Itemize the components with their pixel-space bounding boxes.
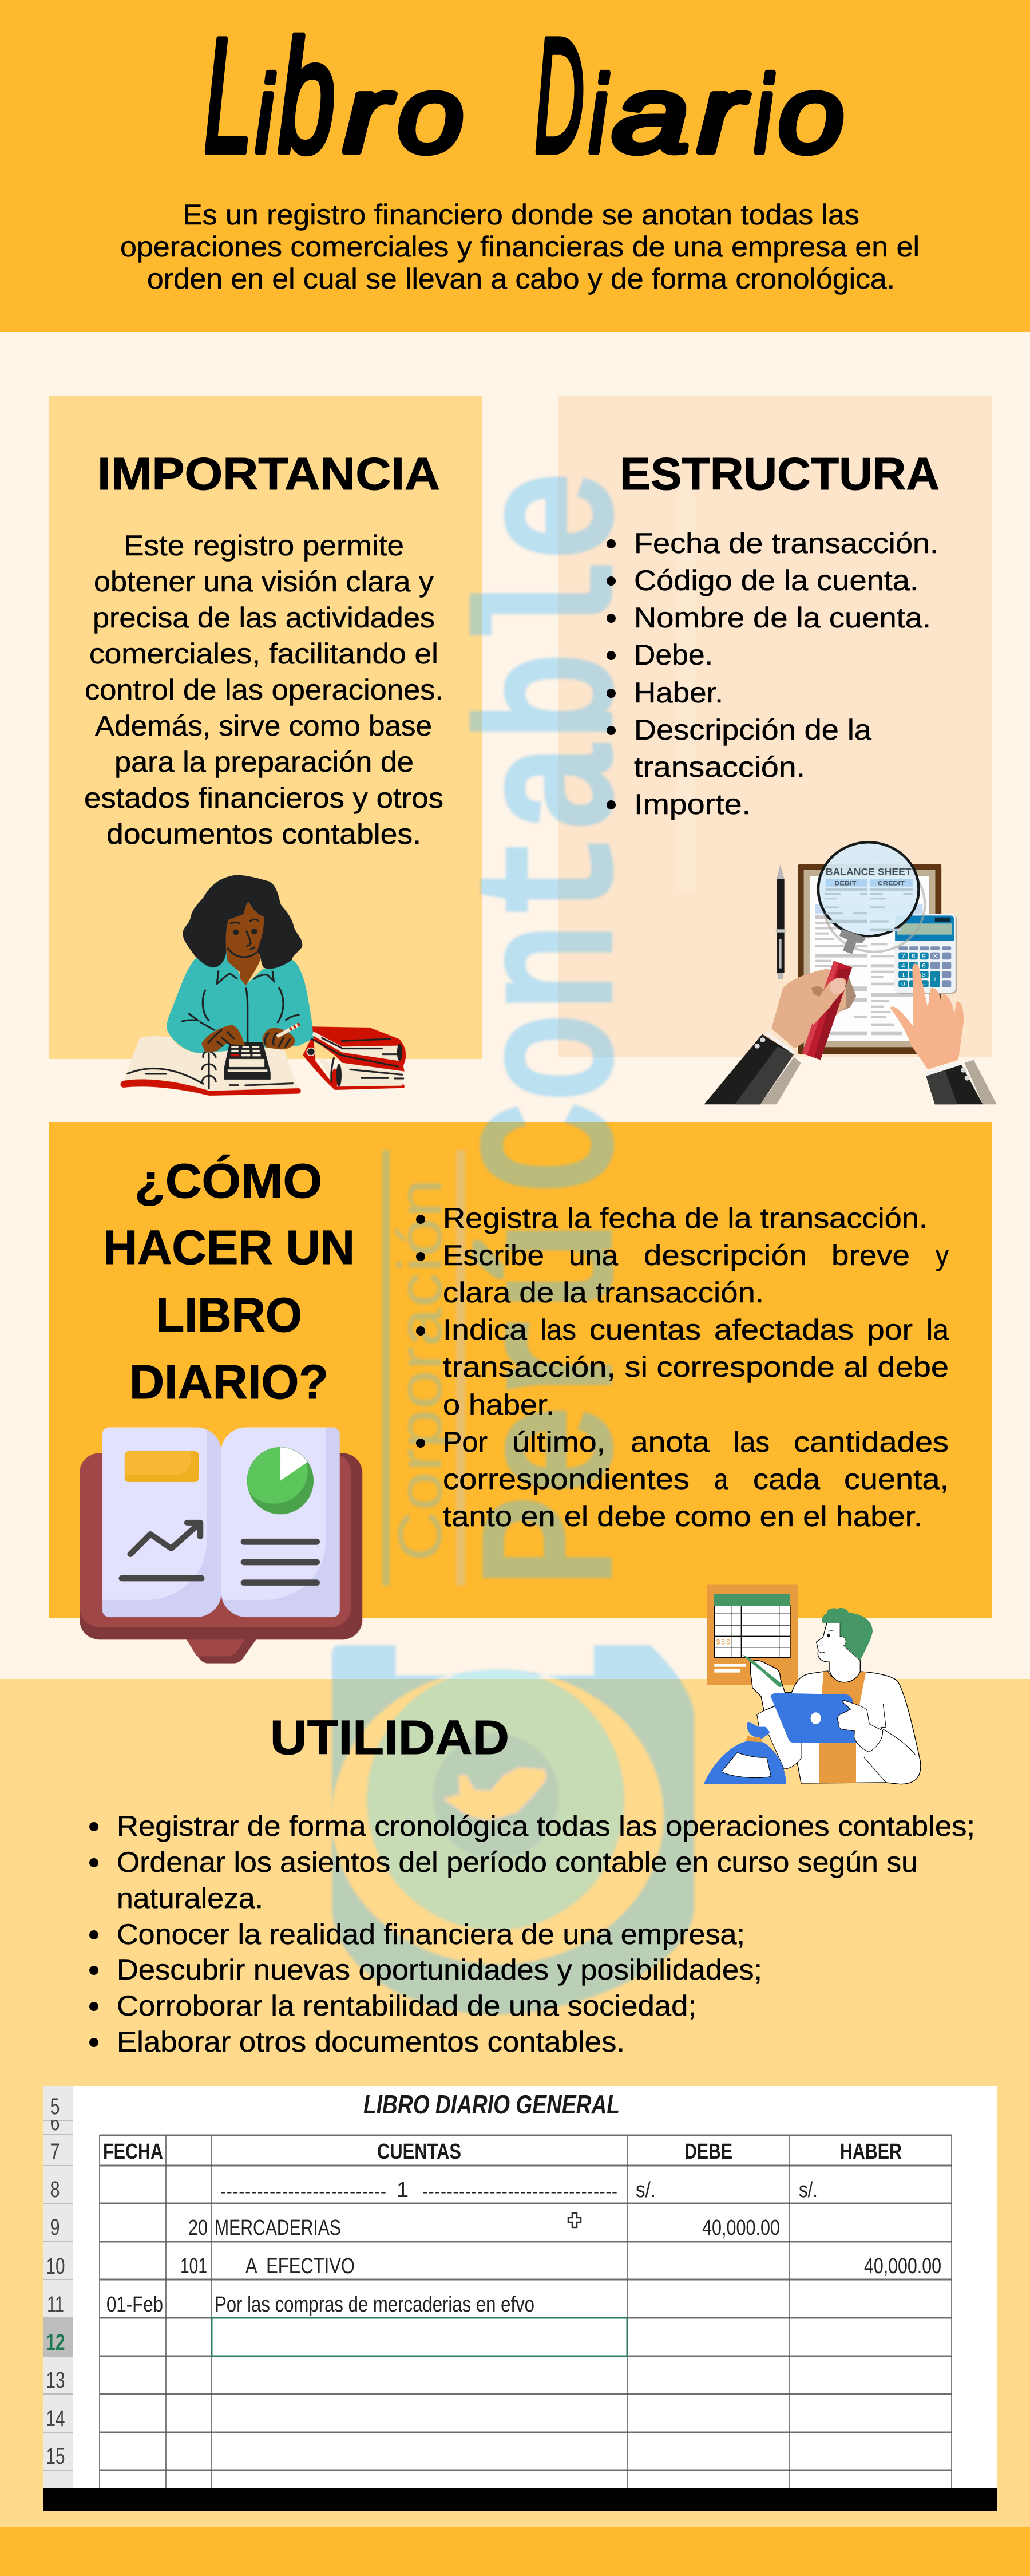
icon: open book with charts — [80, 1427, 362, 1664]
importancia text: para la preparación de — [114, 746, 414, 778]
como hacer list: breve — [831, 1239, 910, 1271]
row 10 cells — [180, 2254, 941, 2278]
watermark faint strip — [676, 481, 695, 893]
heading: estructura: ESTRUCTURA — [620, 448, 940, 499]
pencil — [277, 1024, 299, 1037]
row numbers: 13 — [46, 2368, 65, 2393]
calculator: - — [934, 962, 936, 969]
como hacer list: las — [540, 1314, 576, 1346]
como hacer list: anota — [631, 1426, 710, 1458]
title: a — [612, 54, 690, 175]
row numbers: 5 — [50, 2094, 60, 2119]
title: r — [343, 54, 394, 175]
utilidad list: naturaleza. — [117, 1882, 263, 1914]
row 9 cells — [188, 2216, 780, 2240]
como hacer list: correspondientes — [443, 1463, 690, 1495]
icon: balance sheet with magnifier and hands — [704, 842, 997, 1104]
column headers: DEBE — [684, 2140, 732, 2164]
row numbers: 15 — [46, 2444, 65, 2469]
como hacer list: cantidades — [794, 1426, 949, 1458]
row 8 cells: s/. — [636, 2178, 656, 2202]
left thumb — [807, 976, 848, 1025]
intro text — [120, 199, 920, 295]
como hacer list: clara de la transacción. — [443, 1277, 764, 1309]
title: r — [698, 54, 748, 175]
calculator: 4 — [901, 962, 905, 969]
woman hands — [201, 1025, 295, 1052]
green pen — [742, 1655, 782, 1687]
column headers: CUENTAS — [377, 2140, 461, 2164]
row numbers: 11 — [47, 2292, 64, 2317]
pen — [776, 864, 786, 979]
watermark logo bird — [444, 1768, 545, 1820]
tablet camera dot — [811, 1712, 821, 1724]
person hair — [822, 1608, 873, 1661]
calculator: 7 — [901, 953, 905, 960]
open ledger — [122, 1036, 299, 1092]
heading: utilidad: UTILIDAD — [270, 1710, 509, 1764]
red folders — [303, 1026, 406, 1090]
row 8 cells: -------------------------------- — [422, 2182, 617, 2201]
column headers: HABER — [840, 2140, 902, 2164]
estructura list: Fecha de transacción. — [634, 527, 938, 559]
heading: como hacer un libro diario: DIARIO? — [129, 1355, 328, 1409]
como hacer list: cada — [753, 1463, 820, 1495]
estructura list: Importe. — [634, 788, 751, 820]
calculator: 1 — [901, 971, 905, 978]
row 10 cells: 40,000.00 — [864, 2254, 941, 2278]
como hacer list: afectadas — [714, 1314, 854, 1346]
watermark text: Contable: Contable — [454, 471, 663, 1193]
como hacer list: cuentas — [589, 1314, 701, 1346]
como hacer list: las — [734, 1426, 770, 1458]
folder spine lower — [336, 1064, 342, 1086]
woman body — [167, 950, 314, 1053]
importancia text: precisa de las actividades — [93, 602, 435, 634]
como hacer list: tanto en el debe como en el haber. — [443, 1500, 922, 1532]
watermark text: Peru: Perú — [454, 1220, 663, 1587]
estructura list: Código de la cuenta. — [634, 564, 918, 596]
utilidad list: Ordenar los asientos del período contable en curso según su — [117, 1846, 918, 1878]
importancia text: Este registro permite — [124, 530, 404, 562]
row 11 cells: Por las compras de mercaderias en efvo — [215, 2293, 534, 2317]
clipboard — [798, 864, 941, 1054]
calculator: + — [933, 975, 937, 983]
calculator: 8 — [912, 953, 916, 960]
title: o — [398, 54, 464, 175]
como hacer list: Escribe — [443, 1239, 544, 1271]
woman features — [183, 919, 299, 1042]
row header column — [43, 2086, 73, 2488]
watermark logo — [332, 1645, 694, 2014]
folder ring — [307, 1048, 315, 1056]
person holding hand — [751, 1660, 785, 1710]
black bar — [43, 2488, 997, 2511]
calculator red key — [231, 1054, 239, 1056]
cursor icon — [568, 2213, 581, 2227]
intro text: operaciones comerciales y financieras de una empresa en el — [120, 231, 920, 263]
icon: person with tablet and spreadsheet — [704, 1584, 921, 1784]
person right hand — [838, 1700, 883, 1752]
como hacer list: último, — [512, 1426, 605, 1458]
heading: como hacer un libro diario — [103, 1154, 355, 1409]
estructura list: Nombre de la cuenta. — [634, 602, 931, 634]
row 9 cells: 40,000.00 — [702, 2216, 780, 2240]
heading: como hacer un libro diario: LIBRO — [156, 1288, 302, 1342]
watermark — [332, 471, 695, 2014]
row numbers: 12 — [46, 2330, 65, 2355]
column headers: FECHA — [103, 2140, 163, 2164]
heading: importancia: IMPORTANCIA — [97, 448, 440, 499]
right sleeve — [926, 1060, 997, 1104]
right hand — [890, 963, 964, 1069]
row 10 cells: A EFECTIVO — [245, 2254, 355, 2278]
tablet — [771, 1693, 858, 1743]
calculator — [224, 1042, 271, 1080]
folder spine — [397, 1044, 402, 1061]
utilidad list: Descubrir nuevas oportunidades y posibilidades; — [117, 1954, 762, 1986]
text lines — [118, 1539, 320, 1586]
como hacer list: por — [867, 1314, 913, 1346]
panel: utilidad — [0, 1679, 1030, 2527]
watermark rule left — [382, 1150, 390, 1586]
person right sleeve — [864, 1704, 915, 1783]
calculator: X — [933, 953, 937, 960]
book cover light — [80, 1453, 351, 1627]
folder lines — [312, 1038, 403, 1082]
left hand — [771, 969, 856, 1049]
footer band — [0, 2527, 1030, 2576]
como hacer list: a — [714, 1463, 728, 1495]
row 11 cells: 01-Feb — [106, 2293, 163, 2317]
woman hair — [183, 875, 302, 969]
estructura list: transacción. — [634, 751, 805, 783]
magnifier lens: CREDIT — [878, 880, 905, 887]
row 8 cells: --------------------------- — [220, 2182, 386, 2201]
bookmark — [187, 1639, 256, 1664]
left page light — [102, 1427, 207, 1600]
row 8 cells: 1 — [397, 2178, 409, 2202]
como hacer list: transacción, si corresponde al debe — [443, 1351, 949, 1383]
person shirt — [819, 1671, 866, 1783]
utilidad list: Conocer la realidad financiera de una empresa; — [117, 1918, 745, 1950]
icon: woman with calculator — [120, 875, 406, 1096]
selected row header — [43, 2318, 73, 2356]
como hacer list: o haber. — [443, 1389, 554, 1421]
person face details — [819, 1631, 834, 1653]
estructura list — [607, 527, 938, 820]
woman face — [226, 902, 264, 986]
row numbers: 8 — [50, 2177, 60, 2202]
left page — [102, 1427, 221, 1617]
row 10 cells: 101 — [180, 2254, 207, 2278]
row numbers: 6 — [50, 2110, 60, 2135]
row 8 cells: s/. — [799, 2178, 818, 2202]
title: i — [755, 54, 774, 175]
row 11 cells — [106, 2293, 534, 2317]
panel: estructura — [558, 396, 992, 1057]
watermark rule right — [456, 1150, 465, 1586]
importancia text: control de las operaciones. — [85, 674, 443, 706]
heading: como hacer un libro diario: HACER UN — [103, 1220, 355, 1274]
column headers — [103, 2140, 902, 2164]
header band — [0, 0, 1030, 332]
intro text: Es un registro financiero donde se anotan todas las — [183, 199, 859, 231]
spreadsheet board: $$$ — [716, 1638, 730, 1646]
como hacer list: y — [936, 1239, 949, 1271]
row 9 cells: MERCADERIAS — [215, 2216, 341, 2240]
watermark text: Corporacion: Corporación — [385, 1179, 454, 1562]
ledger lines — [128, 1051, 292, 1089]
row numbers — [46, 2094, 65, 2469]
magnifier handle — [802, 961, 852, 1060]
row header dividers — [43, 2120, 73, 2470]
utilidad list — [89, 1810, 975, 2058]
calculator: 0 — [901, 981, 905, 988]
calculator screen and keys — [228, 1046, 267, 1072]
person head — [817, 1623, 860, 1682]
row numbers: 10 — [46, 2254, 65, 2279]
title: b — [278, 7, 335, 186]
importancia text: estados financieros y otros — [84, 782, 443, 814]
line chart arrow — [130, 1523, 200, 1554]
orange card — [125, 1451, 199, 1482]
spreadsheet board — [707, 1584, 798, 1685]
row numbers: 9 — [50, 2215, 60, 2240]
utilidad list: Corroborar la rentabilidad de una sociedad; — [117, 1990, 696, 2022]
estructura list: Debe. — [634, 639, 713, 671]
como hacer list: Indica — [443, 1314, 527, 1346]
person left arm — [757, 1698, 801, 1769]
estructura list: Descripción de la — [634, 714, 871, 746]
magnifier lens: BALANCE SHEET — [826, 866, 912, 877]
panel: importancia — [49, 396, 482, 1059]
como hacer list: cuenta, — [844, 1463, 949, 1495]
title: i — [589, 54, 608, 175]
pie wedge — [280, 1447, 307, 1481]
calculator: = — [922, 981, 926, 988]
sheet background — [43, 2086, 997, 2488]
person coat — [784, 1671, 921, 1784]
magnifier lens: DEBIT — [834, 880, 857, 887]
orange card light — [125, 1451, 191, 1475]
title: L — [204, 5, 252, 187]
woman eyes — [233, 929, 258, 935]
panel: como hacer — [49, 1122, 992, 1618]
importancia text: documentos contables. — [106, 818, 421, 850]
pencil stripes — [290, 1024, 300, 1029]
calculator — [894, 914, 957, 994]
table grid — [100, 2135, 952, 2488]
estructura list: Haber. — [634, 677, 723, 709]
spreadsheet: libro diario general — [43, 2086, 997, 2511]
como hacer list: descripción — [644, 1239, 807, 1271]
money bag — [704, 1722, 786, 1784]
right page light — [221, 1427, 326, 1600]
row numbers: 7 — [50, 2139, 60, 2164]
title: i — [256, 54, 275, 175]
como hacer list: una — [569, 1239, 618, 1271]
left sleeve — [704, 1032, 801, 1104]
bookmark light — [187, 1639, 245, 1656]
row 8 cells — [220, 2178, 818, 2202]
como hacer list: Registra la fecha de la transacción. — [443, 1202, 928, 1234]
right page — [221, 1427, 340, 1617]
calculator: 9 — [922, 953, 926, 960]
magnifier lens — [818, 842, 925, 954]
pie chart — [247, 1447, 314, 1514]
book cover — [80, 1453, 362, 1639]
folder pages — [312, 1032, 402, 1086]
row 9 cells: 20 — [188, 2216, 208, 2240]
importancia text: obtener una visión clara y — [94, 566, 434, 598]
pie chart light — [247, 1447, 308, 1504]
row numbers: 14 — [46, 2406, 65, 2431]
finger lines — [208, 1030, 290, 1046]
utilidad list: Elaborar otros documentos contables. — [117, 2026, 625, 2058]
como hacer list: Por — [443, 1426, 488, 1458]
title: D — [516, 5, 584, 187]
sheet title: LIBRO DIARIO GENERAL — [363, 2089, 620, 2119]
importancia text — [84, 530, 443, 850]
ledger red edge — [120, 1079, 301, 1096]
importancia text: Además, sirve como base — [95, 710, 432, 742]
importancia text: comerciales, facilitando el — [89, 638, 438, 670]
como hacer list — [416, 1202, 949, 1532]
title: o — [778, 54, 844, 175]
utilidad list: Registrar de forma cronológica todas las operaciones contables; — [117, 1810, 975, 1842]
como hacer list: la — [926, 1314, 949, 1346]
calculator: 6 — [922, 962, 926, 969]
heading: como hacer un libro diario: ¿CÓMO — [134, 1154, 322, 1208]
intro text: orden en el cual se llevan a cabo y de forma cronológica. — [147, 263, 895, 295]
selected cell — [212, 2318, 627, 2356]
calculator: 3 — [922, 971, 926, 978]
